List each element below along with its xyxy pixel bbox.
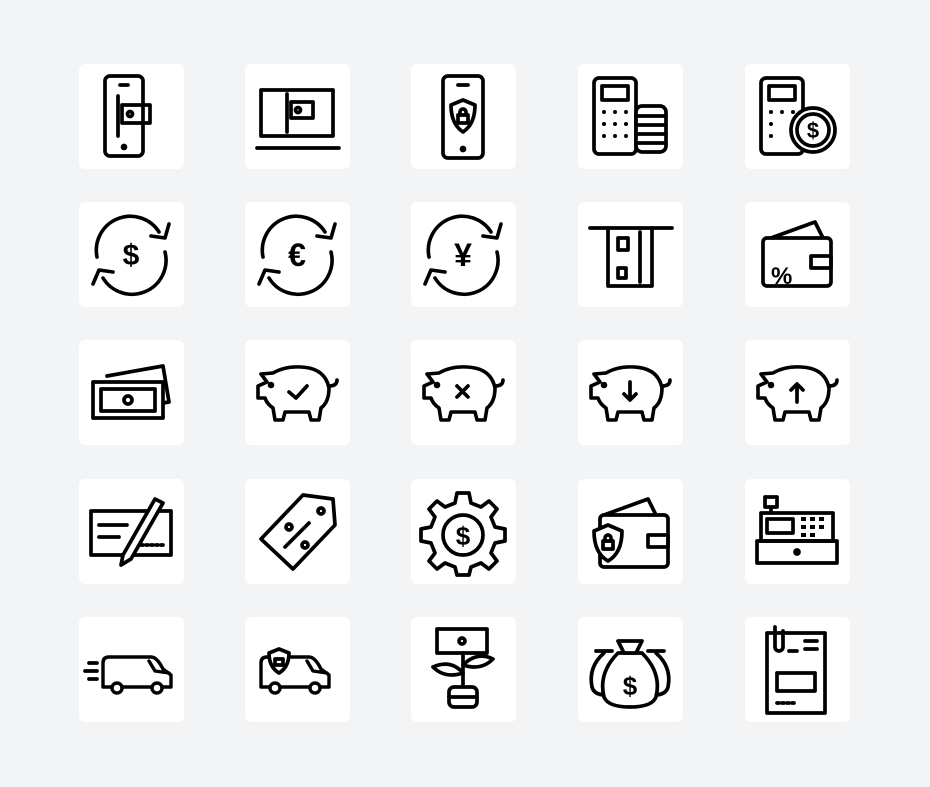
icon: dollar exchange: $	[123, 239, 140, 272]
icon: van shield	[261, 649, 329, 693]
icon: money bags: $	[623, 671, 638, 701]
icon: gear dollar	[421, 493, 505, 575]
icon: gear dollar: $	[456, 521, 471, 551]
icon: cash bills	[93, 366, 169, 418]
icon: invoice document	[767, 627, 825, 713]
icon: dollar exchange	[93, 216, 169, 294]
icon: yen exchange	[425, 216, 501, 294]
icon: cash register	[757, 497, 837, 563]
icon: phone shield	[443, 76, 483, 158]
icon: wallet shield	[594, 499, 668, 567]
icon: piggy check	[258, 367, 337, 420]
icon: atm card	[590, 228, 672, 286]
icon: price tag percent	[261, 495, 335, 569]
icon: wallet percent	[763, 222, 831, 290]
icon: calculator dollar: $	[807, 118, 819, 143]
icon: piggy down	[591, 367, 670, 420]
icon: laptop cash	[257, 90, 339, 148]
icon: yen exchange: ¥	[454, 237, 472, 273]
icon: calculator dollar	[761, 78, 835, 154]
icon: piggy up	[758, 367, 837, 420]
icon: calculator coins	[594, 78, 666, 154]
icon: cheque pencil	[91, 499, 171, 565]
icon: euro exchange	[259, 216, 335, 294]
icon: phone cash	[105, 76, 150, 156]
icon: money plant	[433, 629, 493, 707]
icon: piggy cross	[424, 367, 503, 420]
icon: euro exchange: €	[288, 237, 306, 273]
icon: wallet percent: %	[771, 263, 792, 290]
icon: fast van	[85, 657, 171, 693]
icon: money bags	[591, 641, 669, 707]
